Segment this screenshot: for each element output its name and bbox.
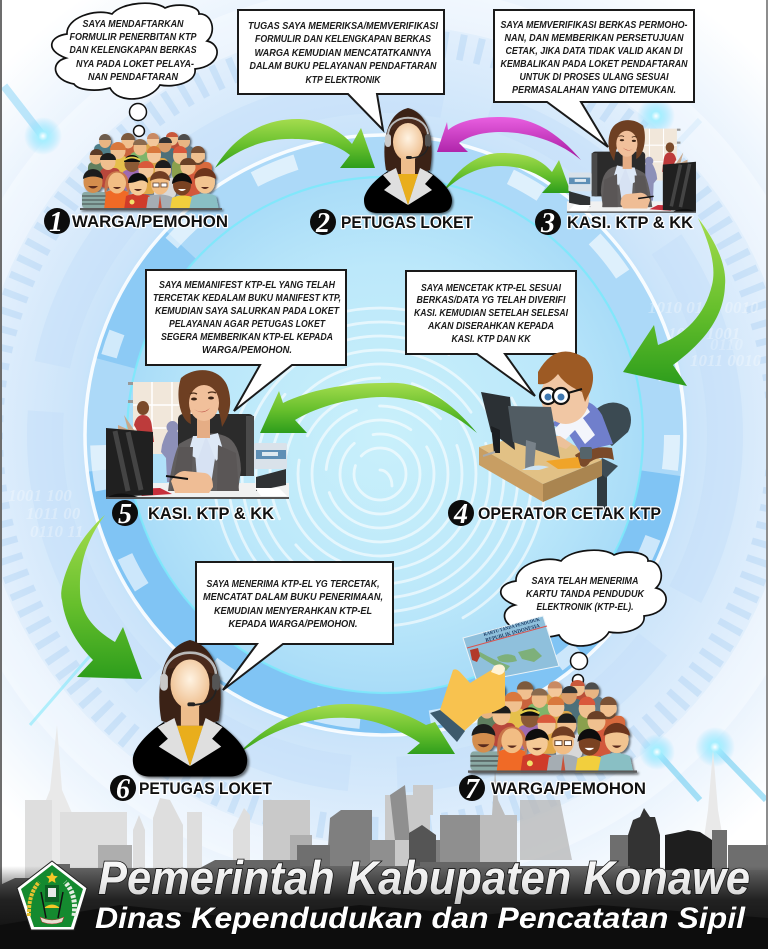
step 5: speech box: WARGA/PEMOHON. (202, 345, 292, 356)
step 6: speech box: SAYA MENERIMA KTP-EL YG TERCETAK, (206, 579, 380, 590)
step 7: label (459, 774, 646, 805)
binary text: 1010 0101 0010 (648, 298, 759, 317)
step 6: label: 6 (116, 774, 130, 805)
step 7: hand holding ktp card: KARTU TANDA PENDUDUK (483, 618, 541, 638)
step 7: thought bubble: ELEKTRONIK (KTP-EL). (536, 602, 634, 613)
step 1: warga thought bubble: NYA PADA LOKET PELAYA- (76, 59, 195, 70)
step 6: label: PETUGAS LOKET (139, 780, 272, 798)
step 7: label: 7 (465, 774, 480, 805)
step 7: thought bubble: SAYA TELAH MENERIMA (532, 576, 638, 587)
step 3: speech box: UNTUK DI PROSES ULANG SESUAI (520, 72, 669, 83)
step 3: speech box: KEMBALIKAN PADA LOKET PENDAFTARAN (500, 59, 688, 70)
step 7: thought bubble (501, 550, 666, 695)
step 2: label (310, 208, 473, 239)
step 2: petugas loket figure (364, 108, 452, 213)
step 1: label (44, 207, 228, 238)
step 4: label: 4 (453, 499, 468, 530)
step 6: label (110, 774, 272, 805)
step 3: label: 3 (540, 208, 555, 239)
step 5: label (112, 499, 274, 530)
step 1: warga thought bubble: FORMULIR PENERBITAN KTP (70, 32, 197, 43)
binary text: 0110 (710, 335, 744, 354)
step 6: speech box: KEPADA WARGA/PEMOHON. (228, 619, 358, 630)
step 4: speech box: KASI. KEMUDIAN SETELAH SELESAI (414, 308, 568, 319)
footer title: dinas kependudukan dan pencatatan sipil: Dinas Kependudukan dan Pencatatan Sipil (95, 902, 746, 935)
step 1: warga thought bubble (52, 3, 217, 147)
step 4: label (448, 499, 661, 530)
step 3: speech box: CETAK, JIKA DATA TIDAK VALID AKAN DI (506, 46, 683, 57)
footer skyline (0, 725, 768, 949)
step 7: hand holding ktp card (430, 616, 559, 742)
step 2: label: 2 (315, 208, 330, 239)
arrow: step 1 to 2 (215, 119, 375, 168)
arrow: step 5 to 6 (61, 515, 142, 679)
arrow: step 3 back to 2 (437, 117, 581, 160)
step 7: crowd illustration (468, 680, 637, 773)
step 7: thought bubble: KARTU TANDA PENDUDUK (526, 589, 645, 600)
light streaks (4, 86, 766, 800)
step 3: speech box (494, 10, 694, 147)
step 5: speech box: TERCETAK KEDALAM BUKU MANIFEST KTP, (153, 293, 341, 304)
step 7: label: WARGA/PEMOHON (491, 780, 646, 798)
step 6: speech box: MENCATAT DALAM BUKU PENERIMAAN, (203, 592, 383, 603)
step 4: speech box: AKAN DISERAHKAN KEPADA (427, 321, 554, 332)
step 3: label: KASI. KTP & KK (567, 214, 693, 232)
arrow: step 3 to 4 (623, 218, 725, 386)
step 5: speech box: SEGERA MEMBERIKAN KTP-EL KEPADA (161, 332, 333, 343)
step 4: speech box: BERKAS/DATA YG TELAH DIVERIFI (416, 295, 566, 306)
binary text: 1011 00 (26, 504, 81, 523)
step 3: label (535, 208, 693, 239)
step 2: speech box: KTP ELEKTRONIK (306, 75, 381, 86)
binary text: 1001 100 (8, 486, 72, 505)
step 1: warga thought bubble: DAN KELENGKAPAN BERKAS (70, 45, 197, 56)
step 1: label: WARGA/PEMOHON (72, 213, 228, 231)
step 3: kasi ktp desk illustration (567, 120, 696, 213)
step 3: speech box: NAN, DAN MEMBERIKAN PERSETUJUAN (504, 33, 684, 44)
step 2: speech box (238, 10, 444, 130)
step 4: label: OPERATOR CETAK KTP (478, 505, 661, 523)
step 4: speech box (406, 271, 576, 396)
step 1: crowd illustration (80, 132, 222, 210)
step 5: speech box: SAYA MEMANIFEST KTP-EL YANG TELAH (159, 280, 336, 291)
step 3: speech box: PERMASALAHAN YANG DITEMUKAN. (512, 85, 676, 96)
step 2: speech box: WARGA KEMUDIAN MENCATATKANNYA (254, 48, 432, 59)
fingerprint (214, 308, 546, 640)
step 2: speech box: TUGAS SAYA MEMERIKSA/MEMVERIFIKASI (248, 21, 438, 32)
step 7: hand holding ktp card: REPUBLIK INDONESIA (485, 623, 541, 644)
logo: kabupaten konawe emblem (17, 861, 87, 930)
step 4: operator illustration (479, 352, 631, 510)
step 1: warga thought bubble: NAN PENDAFTARAN (88, 72, 179, 83)
step 6: speech box (196, 562, 393, 690)
step 5: speech box: KEMUDIAN SAYA SALURKAN PADA LOKET (155, 306, 340, 317)
binary text: 1010 1001 (668, 324, 740, 343)
step 5: speech box (146, 270, 346, 411)
binary text: 0110 11 (30, 522, 83, 541)
step 5: kasi ktp desk illustration (106, 370, 289, 499)
binary text (8, 298, 762, 541)
step 2: speech box: DALAM BUKU PELAYANAN PENDAFTARAN (250, 61, 437, 72)
step 2: speech box: FORMULIR DAN KELENGKAPAN BERKAS (255, 34, 431, 45)
step 6: speech box: KEMUDIAN MENYERAHKAN KTP-EL (214, 606, 372, 617)
step 5: label: 5 (118, 499, 132, 530)
step 5: speech box: PELAYANAN AGAR PETUGAS LOKET (169, 319, 326, 330)
binary text: 1011 0010 (690, 351, 762, 370)
step 1: warga thought bubble: SAYA MENDAFTARKAN (82, 19, 184, 30)
step 4: speech box: KASI. KTP DAN KK (452, 334, 531, 345)
step 5: label: KASI. KTP & KK (148, 505, 274, 523)
step 3: speech box: SAYA MEMVERIFIKASI BERKAS PERMOHO- (500, 20, 688, 31)
step 6: petugas loket figure (133, 640, 247, 776)
arrow: step 4 to 5 (260, 383, 477, 433)
step 4: speech box: SAYA MENCETAK KTP-EL SESUAI (421, 283, 561, 294)
arrow: step 6 to 7 (237, 704, 455, 755)
arrow: step 2 to 3 (442, 153, 571, 193)
step 2: label: PETUGAS LOKET (341, 214, 473, 232)
step 1: label: 1 (49, 207, 63, 238)
